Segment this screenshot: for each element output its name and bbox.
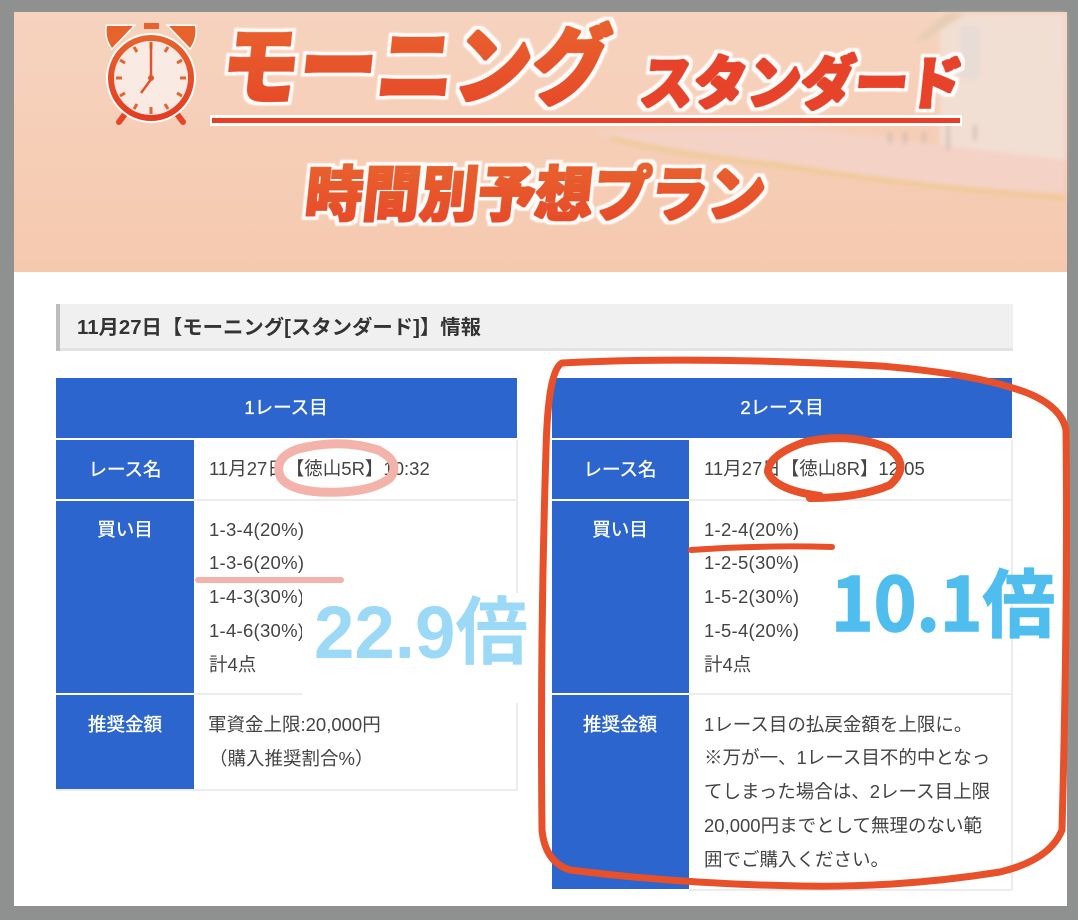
banner background [14, 12, 1067, 272]
race 2 row: race name: レース名 [583, 459, 657, 480]
race 2 row: picks: 1-2-4(20%) [704, 519, 799, 540]
race 1 row: recommended amount: 軍資金上限:20,000円 [208, 714, 381, 735]
race 2 row: recommended amount: 20,000円までとして無理のない範 [704, 815, 982, 836]
race 2 row: picks [552, 501, 799, 693]
highlight: red underline on race 2 hit [691, 546, 832, 550]
race 2 row: recommended amount: てしまった場合は、2レース目上限 [704, 781, 990, 802]
title underline [210, 115, 962, 126]
section heading: 11月27日【モーニング[スタンダード]】情報 [77, 315, 481, 339]
race 2 row: picks: 買い目 [592, 519, 648, 540]
highlight: pink underline on race 1 hit [198, 577, 341, 583]
highlight: red outline around race 2 panel [542, 360, 1066, 886]
race 2 row: recommended amount: 囲でご購入ください。 [704, 849, 889, 870]
race 2 row: picks: 計4点 [704, 654, 751, 675]
race 2 header [552, 378, 1012, 438]
race 1 row: recommended amount: （購入推奨割合%） [209, 748, 373, 769]
banner boat scene [590, 14, 1065, 198]
race 1 row: picks: 1-4-6(30%) [209, 620, 304, 641]
race 1 row: picks: 1-3-6(20%) [209, 552, 304, 573]
race 2 row: recommended amount: 1レース目の払戻金額を上限に。 [704, 714, 972, 735]
race 1 row: recommended amount [56, 695, 381, 789]
highlight: pink circle on race 1 venue [279, 444, 394, 492]
race 2 row: race name [552, 440, 925, 499]
race 2 row: picks: 1-2-5(30%) [704, 552, 799, 573]
race 1 row: recommended amount: 推奨金額 [88, 714, 162, 735]
race 1 row: picks [56, 501, 304, 693]
banner [14, 0, 1067, 272]
callout: 22.9倍: 22.9倍 [314, 591, 528, 674]
race 1 row: picks: 1-4-3(30%) [209, 586, 304, 607]
race 1 header [56, 378, 517, 438]
race 1 row: picks: 1-3-4(20%) [209, 519, 304, 540]
race 1 row: picks: 買い目 [97, 519, 153, 540]
callout: 22.9倍 [302, 591, 528, 703]
race 2 row: recommended amount [552, 695, 990, 889]
title: スタンダード: スタンダード [636, 37, 967, 121]
race 1 row: picks: 計4点 [209, 654, 256, 675]
section heading [56, 304, 1013, 351]
race 2 row: recommended amount: 推奨金額 [583, 714, 657, 735]
callout: 10.1倍: 10.1倍 [831, 546, 1055, 653]
race 2 row: race name: 11月27日【徳山8R】12:05 [704, 458, 925, 479]
panel: race 1 table [56, 378, 518, 791]
race 2 header: 2レース目 [740, 397, 824, 418]
race 1 row: race name: 11月27日【徳山5R】10:32 [209, 458, 430, 479]
highlight: red circle on race 2 venue [768, 438, 901, 498]
race 1 header: 1レース目 [244, 397, 328, 418]
race 2 row: recommended amount: ※万が一、1レース目不的中となっ [704, 747, 990, 768]
title: モーニング: モーニング [216, 0, 617, 122]
race 2 row: picks: 1-5-2(30%) [704, 586, 799, 607]
icon: alarm clock [106, 23, 196, 123]
race 1 row: race name [56, 440, 430, 499]
subtitle: 時間別予想プラン: 時間別予想プラン [301, 147, 771, 234]
race 2 row: picks: 1-5-4(20%) [704, 620, 799, 641]
panel: race 2 table [552, 378, 1013, 891]
race 1 row: race name: レース名 [88, 459, 162, 480]
